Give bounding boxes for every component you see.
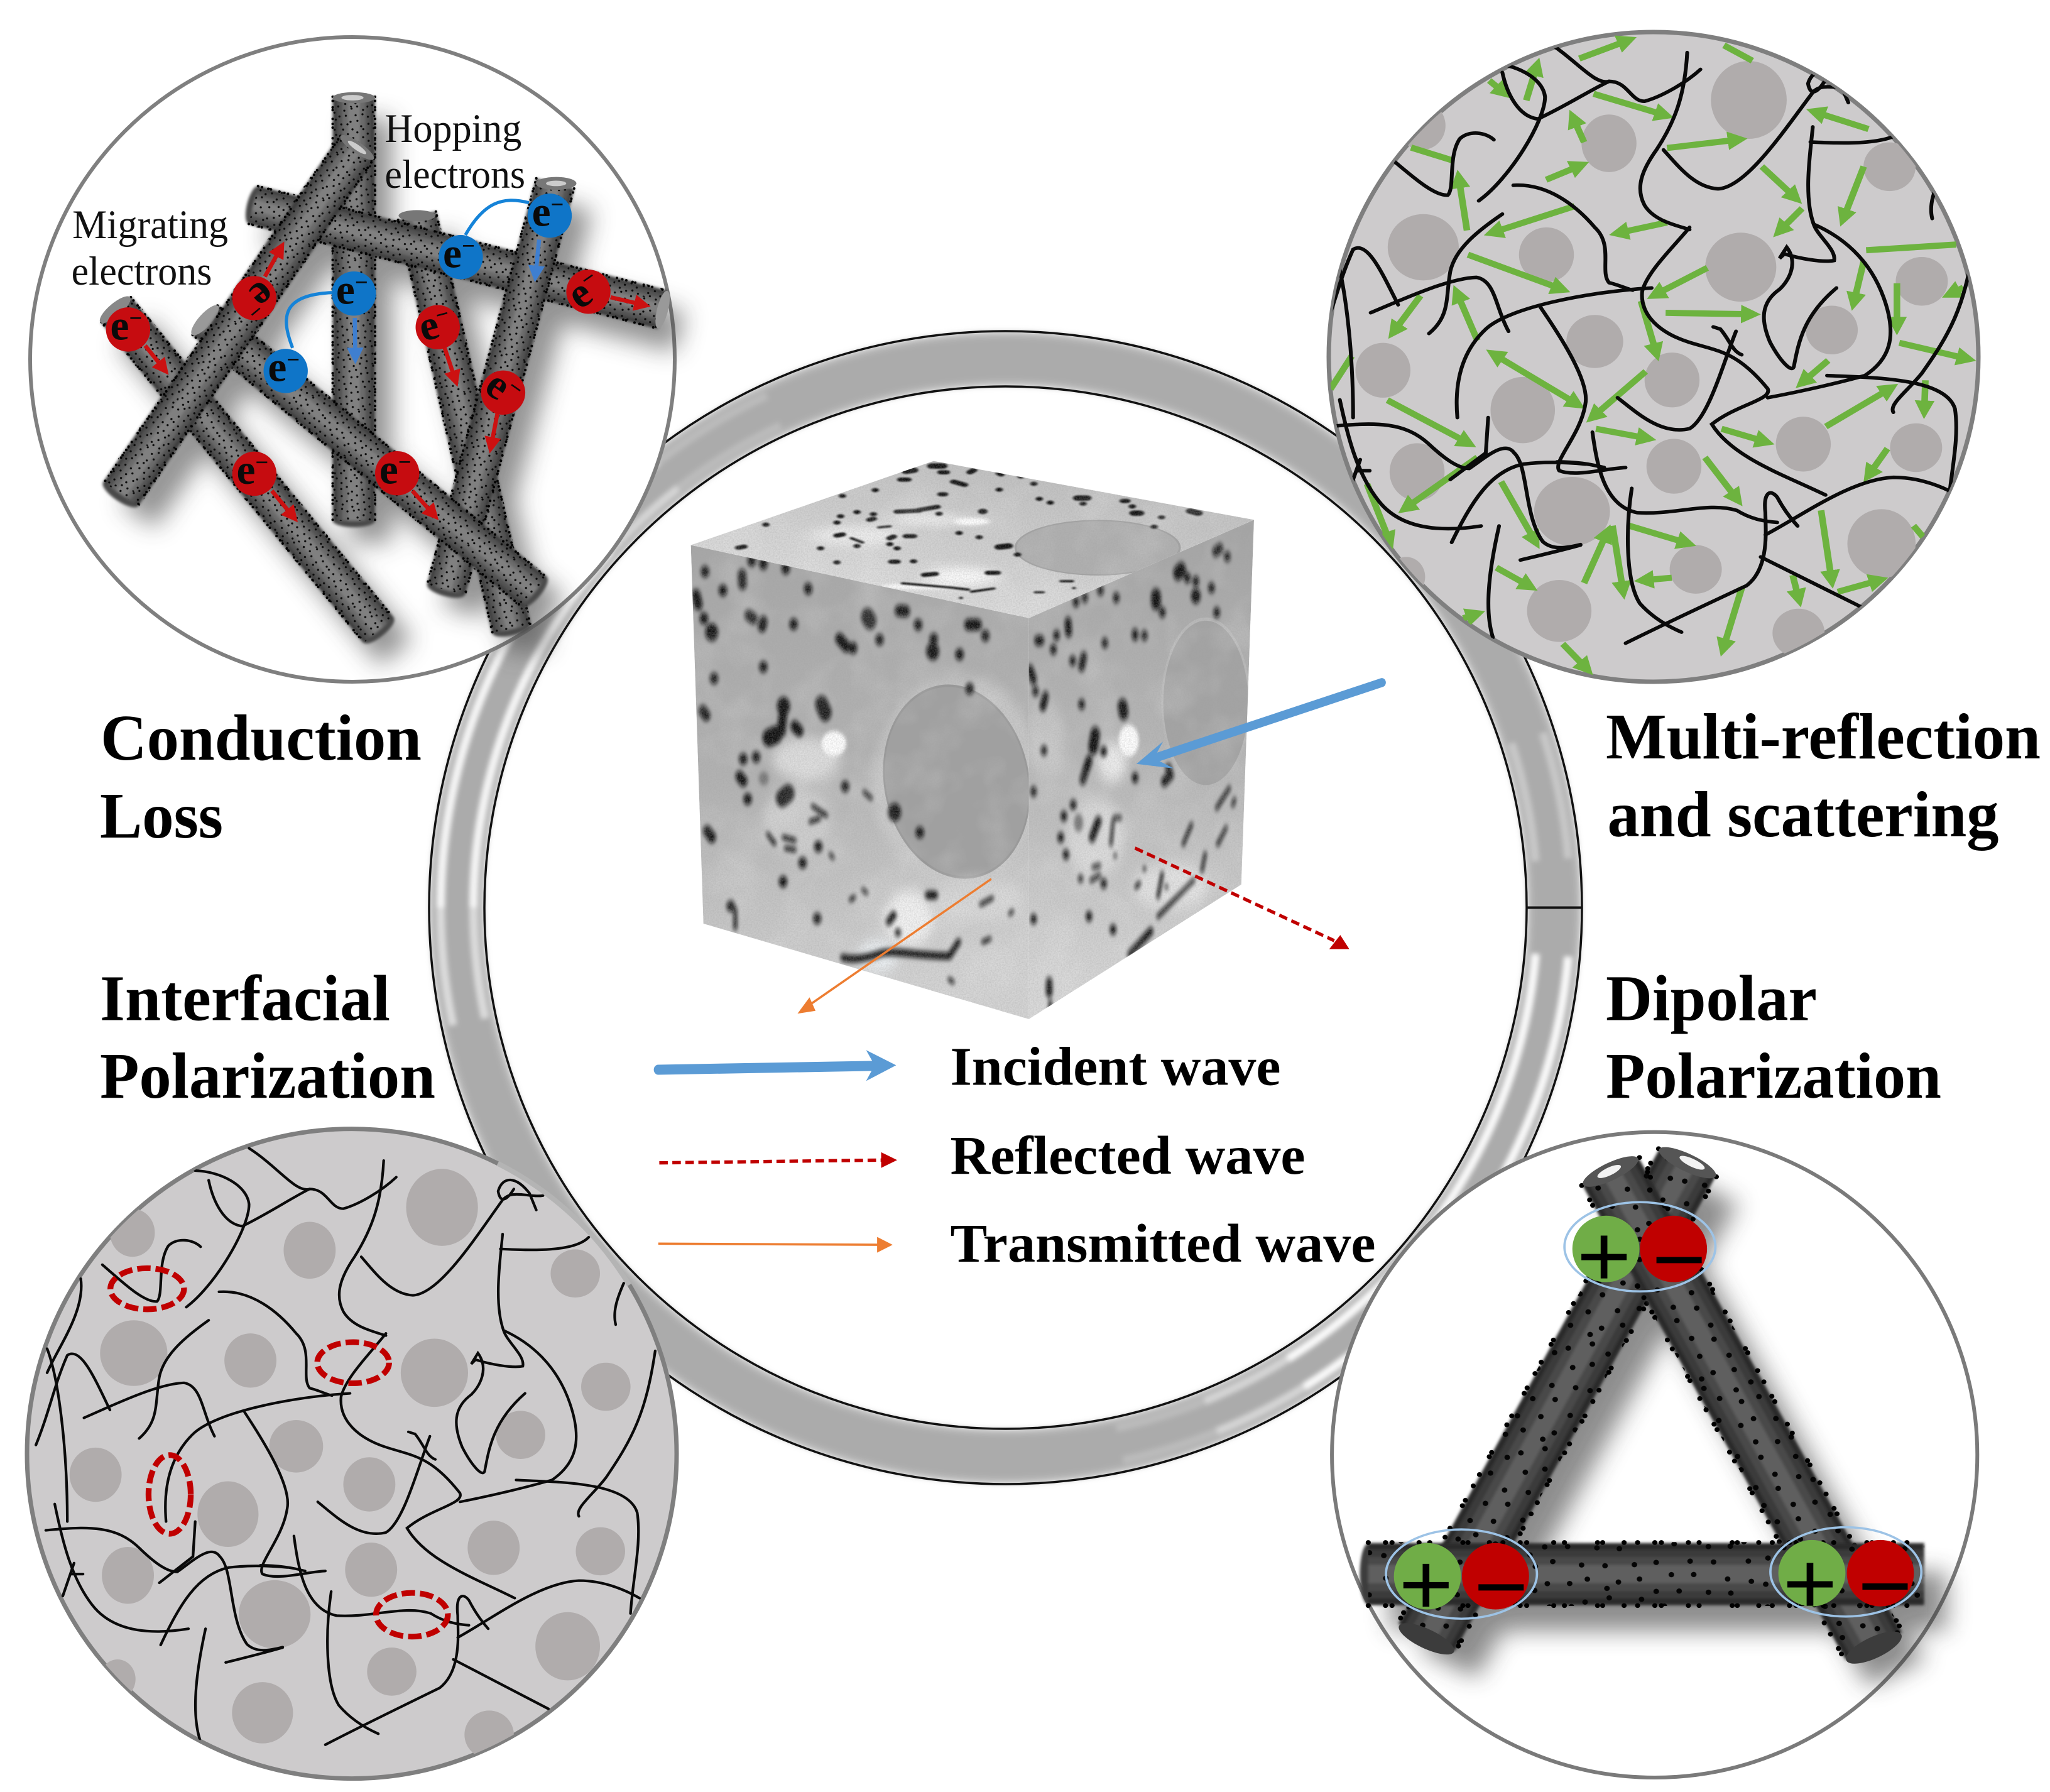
heading: dipolar polarization xyxy=(1606,963,1941,1112)
panel: conduction loss circle xyxy=(30,37,680,682)
migrating electrons: e xyxy=(477,360,520,409)
migrating electrons: e xyxy=(241,271,286,320)
nanotube 6 xyxy=(398,210,532,640)
migrating electrons: e xyxy=(379,445,398,493)
dipole: bottom right xyxy=(1770,1527,1921,1634)
legend arrow: incident wave xyxy=(658,1050,896,1081)
heading: interfacial polarization xyxy=(100,963,435,1112)
heading: dipolar polarization: Dipolar xyxy=(1606,963,1817,1035)
hopping electrons: e xyxy=(532,188,551,235)
interface markers: red dashed ellipses xyxy=(111,1268,448,1637)
label: hopping electrons: electrons xyxy=(384,151,525,197)
hopping electrons: e xyxy=(268,344,286,391)
migrating electrons: e xyxy=(558,268,601,318)
nanotube 1 xyxy=(333,92,375,527)
heading: multi-reflection and scattering xyxy=(1606,701,2041,851)
migrating electrons: − xyxy=(243,298,270,326)
cube: right face xyxy=(1026,520,1254,1019)
label: migrating electrons xyxy=(72,202,228,293)
hopping electrons: e xyxy=(336,266,355,313)
heading: interfacial polarization: Interfacial xyxy=(100,963,390,1035)
heading: interfacial polarization: Polarization xyxy=(100,1040,435,1112)
wave arrows and legend xyxy=(658,682,1382,1253)
migrating electrons: − xyxy=(255,449,268,475)
label: migrating electrons: electrons xyxy=(72,248,212,293)
arrow: reflected wave in cube xyxy=(1135,848,1349,949)
hopping arrows xyxy=(286,200,539,354)
migrating electrons: − xyxy=(575,264,601,292)
nanotube 3 xyxy=(243,185,673,330)
legend label: incident wave: Incident wave xyxy=(950,1036,1280,1097)
legend label: reflected wave: Reflected wave xyxy=(950,1125,1306,1186)
heading: multi-reflection and scattering: Multi-reflection xyxy=(1606,701,2041,773)
dipole: bottom left: − xyxy=(1474,1538,1529,1636)
electron motion arrows xyxy=(145,251,640,514)
nanotube 5 xyxy=(187,302,552,611)
panel: multi-reflection circle xyxy=(1320,32,1978,682)
dipole: bottom right: − xyxy=(1858,1537,1912,1634)
arrow: incident wave in cube xyxy=(1137,682,1382,768)
dipole: top xyxy=(1564,1202,1715,1308)
nanotube: left side xyxy=(1395,1142,1720,1661)
panel: interfacial polarization circle xyxy=(27,1129,677,1779)
migrating electrons xyxy=(106,256,619,496)
tube shadows xyxy=(134,119,680,652)
nanotube: right side xyxy=(1579,1150,1906,1670)
cube: top face xyxy=(691,461,1254,618)
nanotube 7 xyxy=(426,177,576,601)
label: hopping electrons: Hopping xyxy=(384,106,521,151)
hopping electrons: − xyxy=(462,232,475,258)
hopping electrons: − xyxy=(286,347,300,373)
hopping electrons: − xyxy=(355,269,368,295)
legend arrow: reflected wave xyxy=(659,1152,897,1168)
dipole: top: + xyxy=(1577,1208,1631,1305)
hopping electrons: − xyxy=(551,191,564,217)
migrating electrons: e xyxy=(236,446,255,493)
panel: dipolar polarization circle xyxy=(1332,1132,1977,1778)
dipole: top: − xyxy=(1652,1211,1706,1308)
nanotube 4 xyxy=(96,292,398,648)
label: migrating electrons: Migrating xyxy=(72,202,228,247)
green scattering arrows xyxy=(1331,41,1963,666)
migrating electrons: − xyxy=(503,373,529,402)
cube: mottling and grain xyxy=(685,456,1263,1021)
nanotube 2 xyxy=(99,131,377,512)
dipole: bottom left: + xyxy=(1399,1536,1453,1633)
migrating electrons: − xyxy=(129,305,142,331)
migrating electrons: − xyxy=(398,449,412,474)
heading: dipolar polarization: Polarization xyxy=(1606,1040,1941,1112)
hopping electrons: e xyxy=(443,229,462,276)
hopping electrons xyxy=(264,188,572,393)
heading: multi-reflection and scattering: and scattering xyxy=(1607,779,1999,851)
heading: conduction loss xyxy=(100,702,422,852)
migrating electrons: e xyxy=(111,302,129,349)
nanotube: bottom side xyxy=(1360,1543,1924,1605)
heading: conduction loss: Conduction xyxy=(101,702,422,774)
dipole: bottom left xyxy=(1386,1529,1537,1636)
cube: microstructure block xyxy=(685,456,1263,1021)
migrating electrons: − xyxy=(432,300,452,328)
dipole: bottom right: + xyxy=(1783,1535,1837,1632)
arrow: transmitted wave in cube xyxy=(797,879,991,1013)
migrating electrons: e xyxy=(413,300,444,351)
legend arrow: transmitted wave xyxy=(658,1237,893,1253)
heading: conduction loss: Loss xyxy=(100,780,223,852)
panel: central ring xyxy=(208,110,1803,1705)
label: hopping electrons xyxy=(384,106,525,197)
legend label: transmitted wave: Transmitted wave xyxy=(950,1213,1376,1274)
cube: left face xyxy=(691,545,1055,1019)
triangle shadow xyxy=(1390,1190,1946,1673)
